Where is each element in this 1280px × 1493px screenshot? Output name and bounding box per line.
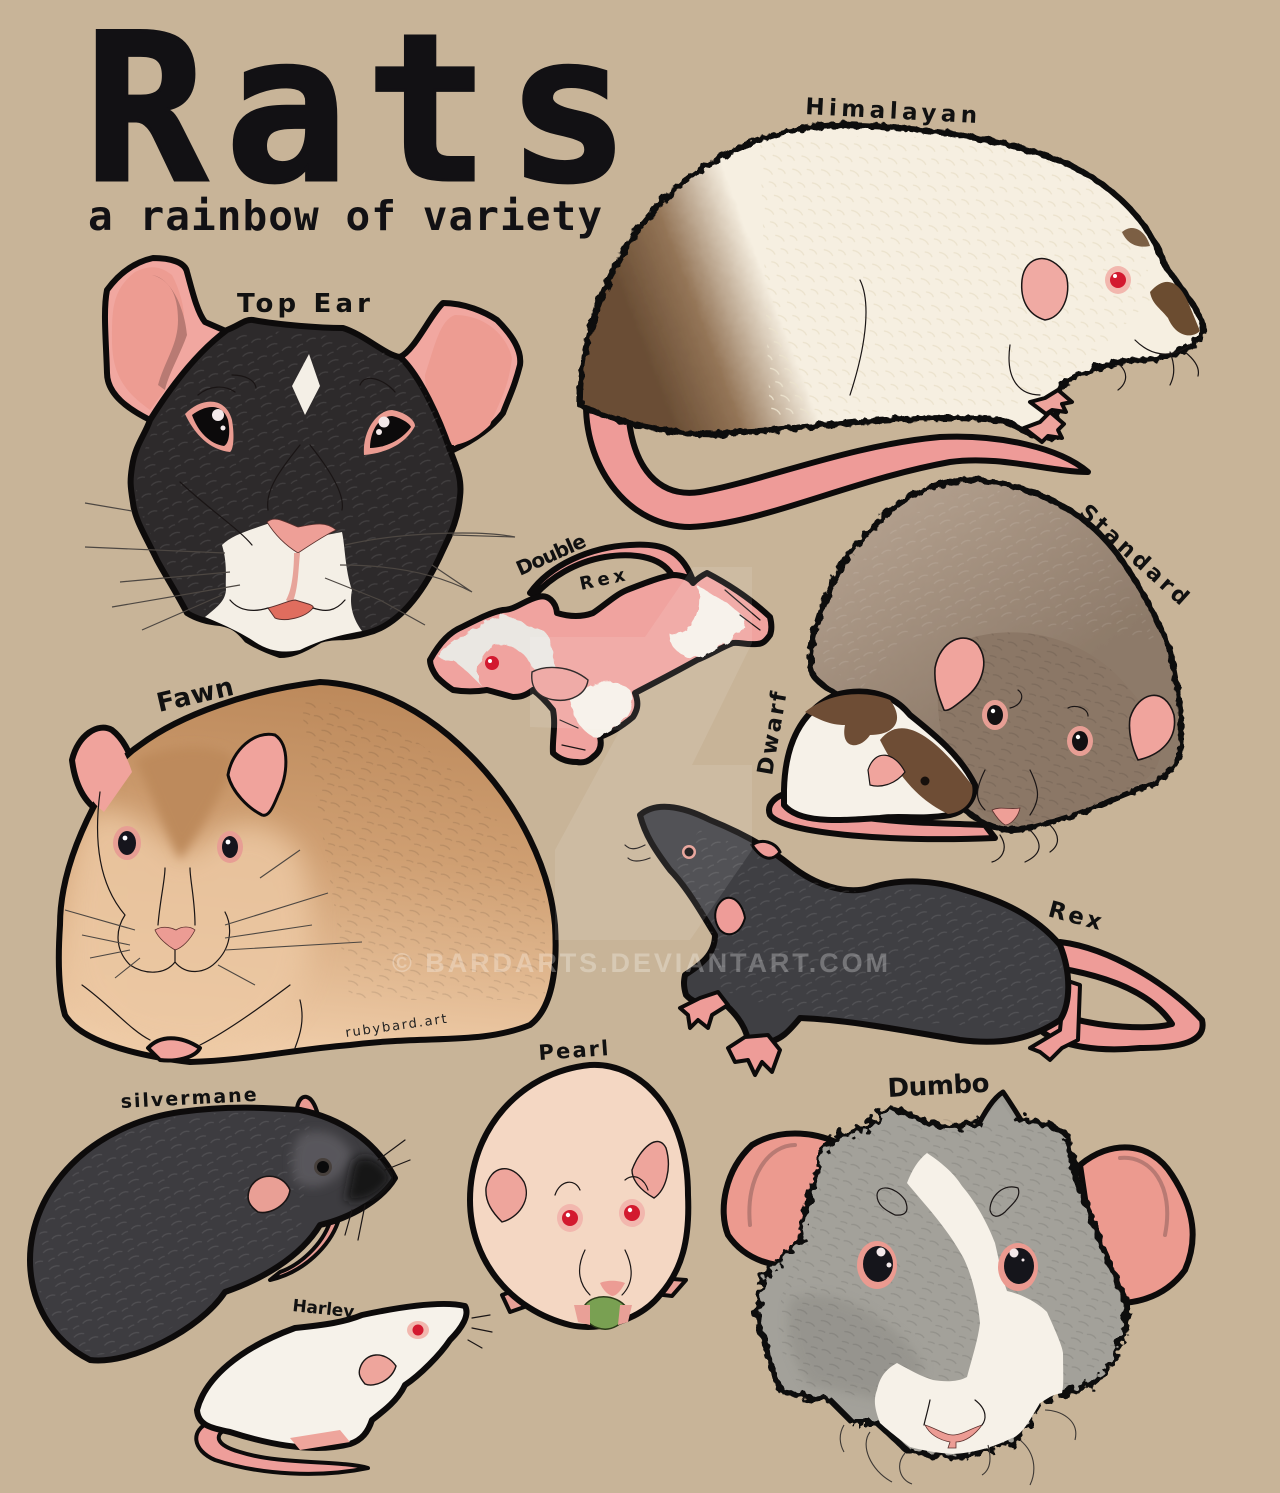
body (197, 1304, 467, 1448)
rat: Dumbo (724, 1092, 1193, 1485)
rat: Double Rex (430, 545, 772, 762)
tail (586, 405, 1088, 527)
rat: Dwarf (784, 692, 975, 820)
right ear (400, 303, 520, 450)
white stripe and muzzle (875, 1153, 1063, 1454)
body (470, 1065, 688, 1327)
rat: Fawn (59, 682, 556, 1062)
body (580, 125, 1203, 438)
eyes (113, 826, 243, 863)
ear (868, 755, 905, 786)
eye (407, 1321, 429, 1339)
subtitle: a rainbow of variety (88, 192, 602, 240)
body lines (850, 280, 1190, 395)
whiskers (1118, 352, 1198, 390)
mouth (268, 600, 313, 620)
snout lines (924, 1400, 985, 1425)
label: Rex on double rex: Rex (578, 565, 627, 595)
tail (196, 1422, 368, 1474)
face lines (180, 375, 395, 545)
nose (267, 519, 336, 553)
tail (270, 1222, 338, 1280)
body fill (59, 682, 556, 1062)
whiskers (468, 1315, 492, 1348)
paws (574, 1305, 632, 1325)
rat: Rex (625, 807, 1203, 1075)
head (938, 632, 1161, 826)
head marking (1150, 282, 1200, 335)
eye (1105, 266, 1131, 294)
label: Himalayan: Himalayan (805, 94, 978, 129)
watermark logo (530, 567, 752, 940)
label: Harley: Harley (291, 1296, 355, 1322)
watermark text: © BARDARTS.DEVIANTART.COM (392, 948, 888, 978)
foot lines (560, 590, 760, 750)
peak tuft (975, 1092, 1030, 1135)
whiskers (345, 1140, 410, 1240)
rat: Standard (769, 480, 1181, 862)
snout (555, 1177, 648, 1295)
fur texture (779, 1118, 1118, 1400)
fur texture (760, 136, 1150, 420)
whiskers (992, 825, 1058, 862)
rat: Harley (196, 1304, 492, 1474)
ear (248, 1176, 290, 1213)
label: Standard: Standard (1074, 500, 1193, 611)
left ear (105, 258, 228, 420)
left ear (72, 728, 136, 815)
label: Pearl: Pearl (538, 1036, 609, 1065)
label: Fawn: Fawn (154, 672, 237, 719)
eye (485, 656, 499, 670)
tail (769, 792, 995, 839)
ears (486, 1169, 526, 1222)
eye (682, 845, 696, 859)
black muzzle (345, 1157, 392, 1202)
body (784, 692, 975, 820)
nose (992, 808, 1020, 825)
whiskers (625, 845, 650, 861)
tail (1040, 942, 1203, 1049)
ear (532, 667, 588, 700)
head marking (140, 750, 230, 860)
left ear (935, 638, 984, 710)
eyes (557, 1199, 645, 1232)
body (810, 480, 1181, 830)
ear (359, 1355, 396, 1385)
right ear front (228, 734, 286, 815)
ear (1022, 259, 1068, 320)
label: Dwarf: Dwarf (753, 690, 793, 777)
label: silvermane: silvermane (120, 1084, 257, 1113)
nose (600, 1281, 625, 1296)
white muzzle (205, 523, 362, 651)
tail (530, 545, 692, 595)
feet (502, 1278, 686, 1312)
rat: Himalayan (580, 125, 1203, 527)
left ear (724, 1134, 850, 1266)
body (640, 807, 1068, 1042)
face lighter fur (64, 800, 318, 994)
label: Double: Double (512, 529, 590, 581)
face lines (978, 690, 1088, 815)
body (30, 1108, 395, 1360)
rat: Top Ear (85, 258, 520, 655)
ear shading (749, 1145, 1167, 1235)
eyes (982, 700, 1093, 756)
eyes (857, 1241, 1038, 1291)
whiskers (840, 1410, 1076, 1485)
signature: rubybard.art (344, 1012, 448, 1041)
white leg fur (570, 682, 633, 738)
head (131, 320, 461, 655)
food (583, 1297, 628, 1329)
body outline (59, 682, 556, 1062)
left ear inner (78, 734, 132, 812)
rat: Silvermane (30, 1097, 410, 1360)
back leg (1030, 980, 1080, 1060)
white fur on head (438, 614, 555, 688)
label: Dumbo: Dumbo (887, 1069, 990, 1104)
foot (290, 1430, 350, 1450)
nose (155, 927, 195, 950)
rat: Pearl (470, 1065, 688, 1329)
front feet (680, 992, 780, 1075)
right eye (364, 410, 415, 455)
eye (920, 776, 930, 786)
fur texture (136, 332, 456, 630)
clipped head shading (292, 1131, 392, 1202)
body (430, 573, 772, 762)
label: Rex: Rex (1045, 897, 1104, 936)
label: Top Ear: Top Ear (237, 289, 370, 319)
brown patches (805, 694, 897, 745)
fawn texture (300, 700, 545, 1000)
nose (925, 1425, 982, 1448)
eye (314, 1158, 332, 1176)
feet (1024, 390, 1072, 442)
arm lines (82, 985, 302, 1048)
paw (148, 1038, 200, 1060)
brow bumps (877, 1188, 907, 1215)
right ear (1129, 695, 1175, 760)
whiskers (65, 850, 362, 985)
grey cheek (292, 1131, 352, 1187)
darker fur shadow (788, 1295, 925, 1400)
clipped face shading (64, 702, 545, 1000)
back ear (297, 1097, 318, 1115)
head (758, 1107, 1127, 1457)
near ear (715, 898, 745, 934)
tuft join (978, 1100, 1028, 1145)
head ear (752, 841, 780, 858)
white hip fur (668, 587, 745, 658)
muzzle and mouth (98, 792, 230, 972)
right ear (1080, 1147, 1193, 1303)
whiskers (85, 503, 515, 630)
diamond star (292, 354, 320, 415)
left eye (185, 402, 233, 452)
